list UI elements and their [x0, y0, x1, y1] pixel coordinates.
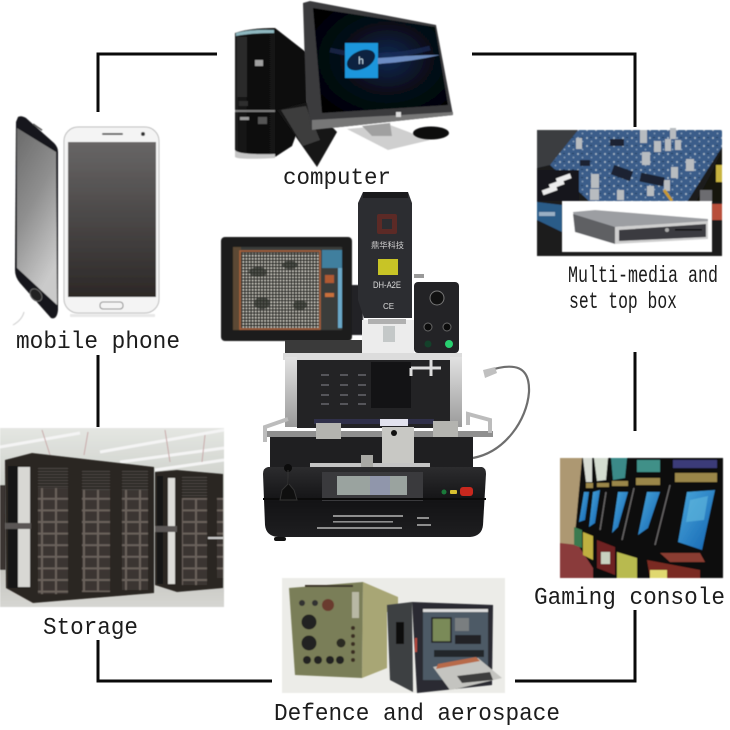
heating head: CE	[383, 302, 394, 311]
label: Defence and aerospace: Defence and aerospace	[274, 701, 560, 728]
monitor with BGA image	[221, 237, 363, 341]
heating head: 鼎华科技	[371, 240, 404, 250]
frame and back plate	[283, 353, 462, 428]
photo: set top box on white	[562, 201, 712, 252]
panel: multi-media and set top box	[537, 128, 722, 315]
heating head: DH-A2E	[373, 280, 401, 290]
label: computer: computer	[283, 165, 391, 191]
white nozzle block	[362, 319, 414, 354]
connector: computer to multi-media	[472, 54, 635, 127]
icon: side-angled black phone	[13, 116, 58, 325]
icon: monitor	[303, 1, 453, 150]
lamp: gooseneck	[473, 367, 529, 458]
label: mobile phone: mobile phone	[16, 329, 180, 356]
server racks	[5, 453, 223, 603]
connector: gaming console to defence	[515, 610, 635, 681]
panel: gaming console	[534, 458, 725, 612]
connector: storage to mobile phone	[96, 355, 100, 427]
panel: rework station DH-A2E	[221, 192, 529, 541]
label: Multi-media and set top box: set top box	[569, 289, 677, 315]
connector: mobile phone to computer	[98, 54, 217, 112]
label: Multi-media and set top box	[568, 263, 718, 315]
connector: multi-media to gaming console	[634, 352, 636, 431]
icon: white front-facing phone	[64, 127, 159, 317]
photo: background	[282, 578, 505, 693]
photo: data-centre background	[0, 428, 224, 607]
military unit, green	[289, 582, 398, 678]
label: Storage: Storage	[43, 615, 138, 642]
panel: mobile phone	[13, 116, 180, 356]
icon: mouse	[413, 126, 449, 140]
machine base with touch screen	[263, 464, 486, 541]
photo: arcade machines	[560, 458, 723, 578]
panel: storage	[0, 428, 224, 642]
control panel	[414, 282, 459, 353]
panel: computer	[235, 1, 453, 191]
PCB holder rails	[263, 414, 493, 468]
connector: defence to storage	[98, 640, 272, 681]
panel: defence and aerospace	[274, 578, 560, 728]
heating head	[358, 192, 424, 318]
icon: desktop tower	[235, 28, 307, 159]
label: Gaming console: Gaming console	[534, 585, 725, 612]
icon: keyboard	[277, 102, 337, 167]
monitor arm and rear	[285, 340, 363, 355]
photo: circuit board	[537, 128, 722, 256]
icon: monitor: h	[358, 56, 364, 68]
military unit, black with drawer	[387, 602, 502, 693]
